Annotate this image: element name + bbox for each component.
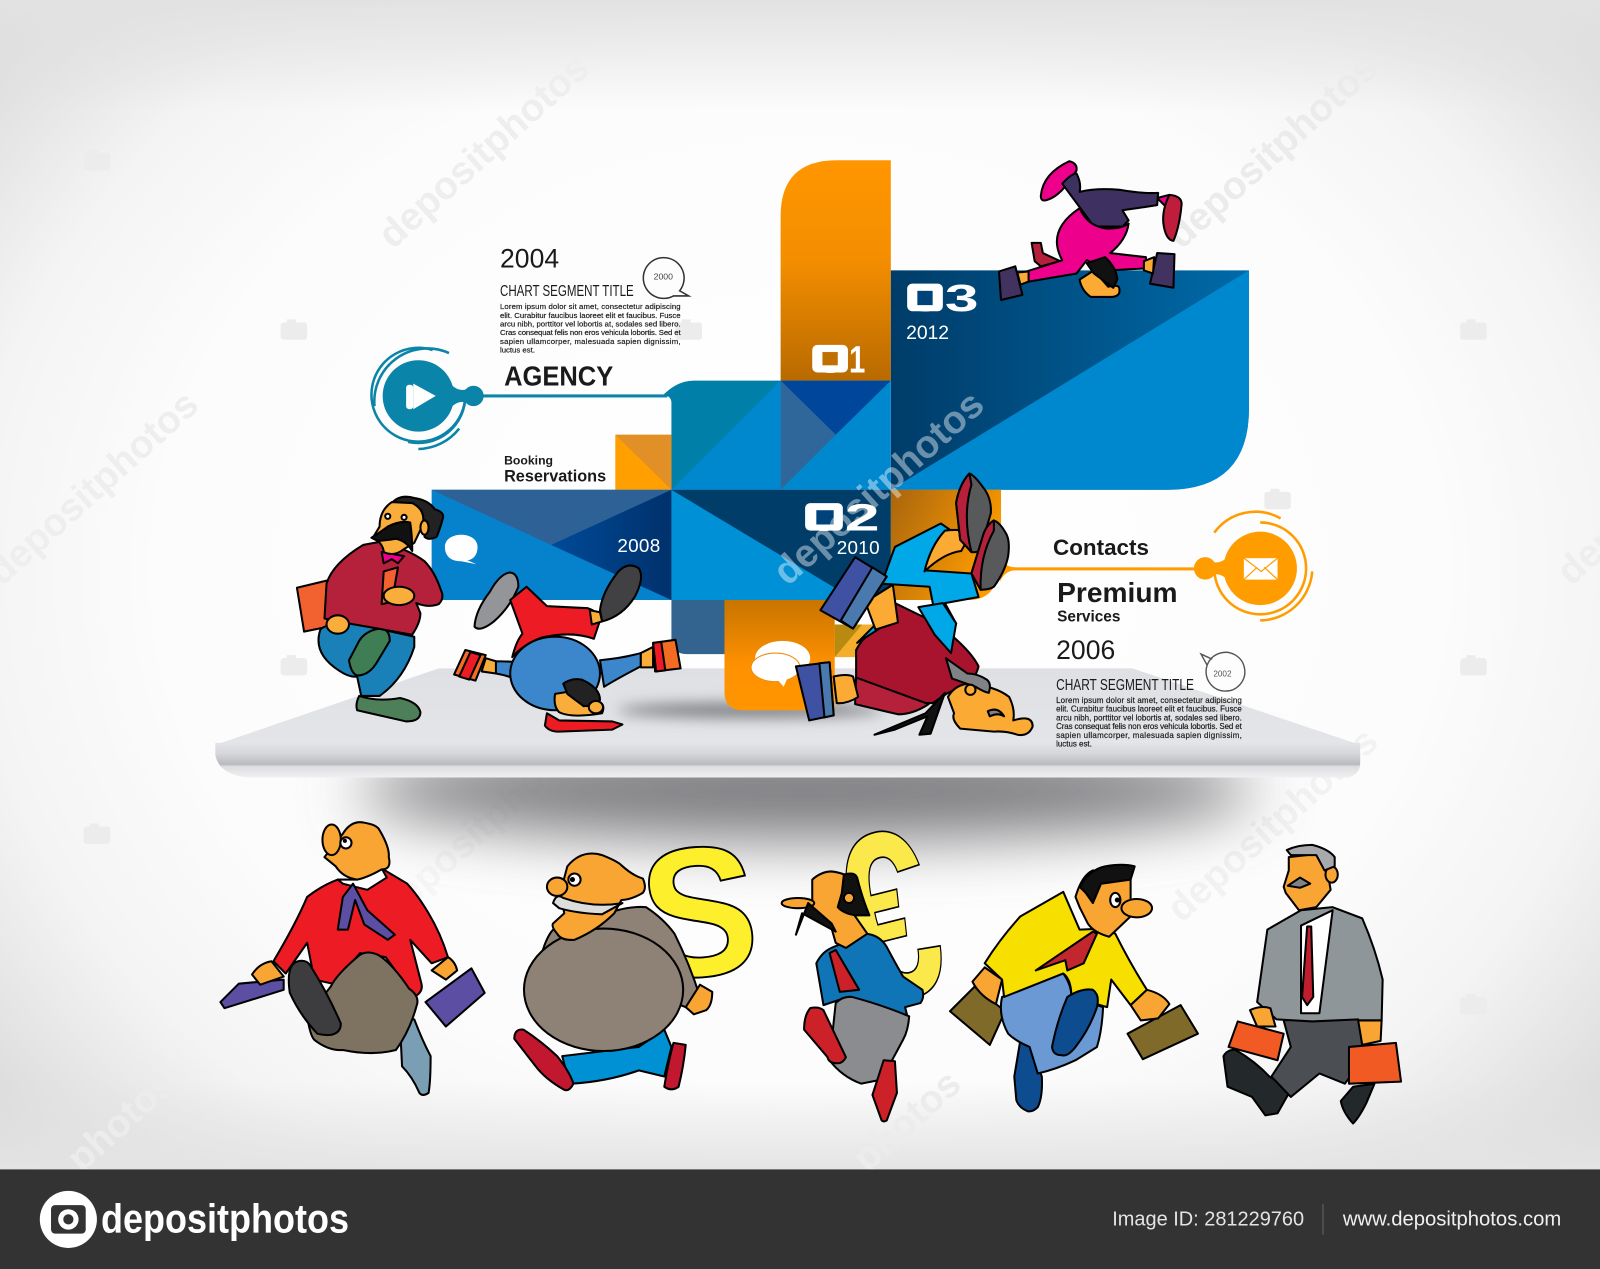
body text: [1056, 696, 1243, 748]
heading: premium services: Services: [1057, 608, 1121, 625]
panel: blue 2008: [432, 490, 671, 600]
label: 02: 2: [845, 497, 880, 539]
label: 02: 0: [805, 497, 843, 539]
character: grey-haired man in suit: [1223, 845, 1401, 1123]
text block: 2004: 2004: [500, 243, 559, 273]
character: man with euro sign: [782, 775, 966, 1121]
character: fat man with dollar sign: [514, 806, 764, 1090]
footer bar: [0, 1169, 1600, 1269]
heading: booking reservations: Booking: [504, 453, 553, 467]
body text: sapien ullamcorper, malesuada sapien dignissim,: [1056, 731, 1242, 740]
icon: speech bubble: [445, 535, 478, 564]
character: man in red sweater: [220, 822, 485, 1095]
heading: contacts: Contacts: [1053, 535, 1149, 560]
website: www.depositphotos.com: [1342, 1209, 1561, 1231]
body text: Cras consequat felis non eros vehicula lobortis. Sed et: [1056, 722, 1243, 731]
body text: luctus est.: [500, 346, 535, 355]
watermark: depositphotos: [1159, 46, 1386, 257]
watermark: photos: [845, 1062, 969, 1180]
watermark over panels: depositphotos: [765, 383, 992, 593]
heading: agency: AGENCY: [504, 361, 613, 392]
text block: 2006: 2006: [1056, 635, 1115, 665]
watermark camera marks: [84, 150, 1487, 1014]
body text: Lorem ipsum dolor sit amet, consectetur adipiscing: [500, 302, 681, 311]
icon: 2000 bubble: [643, 258, 689, 298]
icon: play button with connector: [371, 348, 667, 449]
year: 2008: 2008: [617, 535, 660, 556]
label: 01: 0: [812, 338, 848, 380]
body text: luctus est.: [1056, 739, 1092, 748]
icon: 2000 bubble: 2000: [654, 272, 673, 282]
icon: 2002 bubble: 2002: [1213, 670, 1232, 679]
panel: centre blocks: [663, 381, 891, 490]
heading: booking reservations: Reservations: [504, 468, 606, 486]
label: 03: 3: [945, 277, 979, 319]
logo text: depositphotos: [101, 1196, 349, 1242]
label: 03: [907, 277, 979, 319]
heading: chart segment title: CHART SEGMENT TITLE: [1056, 677, 1194, 694]
shelf platform: [215, 668, 1360, 840]
heading: premium services: Premium: [1057, 577, 1178, 608]
character: man in yellow sweater: [950, 865, 1198, 1111]
character: falling man in blue and red: [454, 565, 681, 732]
heading: chart segment title: CHART SEGMENT TITLE: [500, 283, 634, 300]
watermark: photos: [59, 1062, 184, 1180]
icon: mail button with connector: [1010, 512, 1312, 620]
character: fat man with dollar sign: S: [633, 806, 764, 1019]
panel: blue 02: [671, 490, 891, 600]
character: upside-down man in pink: [999, 161, 1182, 300]
body text: sapien ullamcorper, malesuada sapien dignissim,: [500, 337, 681, 346]
panel: orange contacts block: [891, 490, 1015, 600]
body text: [500, 302, 681, 355]
watermark: depositphotos: [370, 46, 598, 257]
watermark: depositphotos: [370, 719, 598, 930]
body text: elit. Curabitur faucibus laoreet elit et faucibus. Fusce: [500, 311, 681, 320]
label: 01: [812, 338, 865, 380]
body text: arcu nibh, porttitor vel lobortis at, sodales sed libero.: [1056, 713, 1242, 722]
body text: elit. Curabitur faucibus laoreet elit et faucibus. Fusce: [1056, 705, 1242, 714]
watermark: depositphotos: [1159, 719, 1386, 930]
panel: blue lower tab: [671, 600, 726, 654]
character: man with euro sign: €: [811, 775, 966, 1058]
character: tumbling man in crimson: [796, 473, 1033, 735]
text block: 2004: [500, 243, 681, 355]
text block: 2006: [1056, 635, 1243, 748]
panel: small orange block: [615, 435, 671, 490]
year: 2010: 2010: [837, 537, 880, 558]
icon: 2002 bubble: [1201, 652, 1245, 691]
logo icon: camera: [40, 1191, 97, 1248]
panel: orange 01: [781, 160, 891, 381]
label: 01: 1: [849, 338, 865, 380]
label: 03: 0: [907, 277, 943, 319]
icon: double speech bubble: [751, 641, 810, 687]
image id: Image ID: 281229760: [1112, 1209, 1304, 1231]
character: mustached man with folder: [297, 497, 443, 721]
body text: Cras consequat felis non eros vehicula lobortis. Sed et: [500, 328, 681, 337]
year: 2012: 2012: [906, 322, 949, 344]
heading: booking reservations: [504, 453, 606, 486]
panel: orange lower tab: [724, 600, 891, 710]
heading: premium services: [1057, 577, 1178, 625]
body text: Lorem ipsum dolor sit amet, consectetur adipiscing: [1056, 696, 1242, 705]
label: 02: [805, 497, 880, 539]
panel: blue 03: [891, 270, 1249, 490]
body text: arcu nibh, porttitor vel lobortis at, sodales sed libero.: [500, 320, 681, 329]
